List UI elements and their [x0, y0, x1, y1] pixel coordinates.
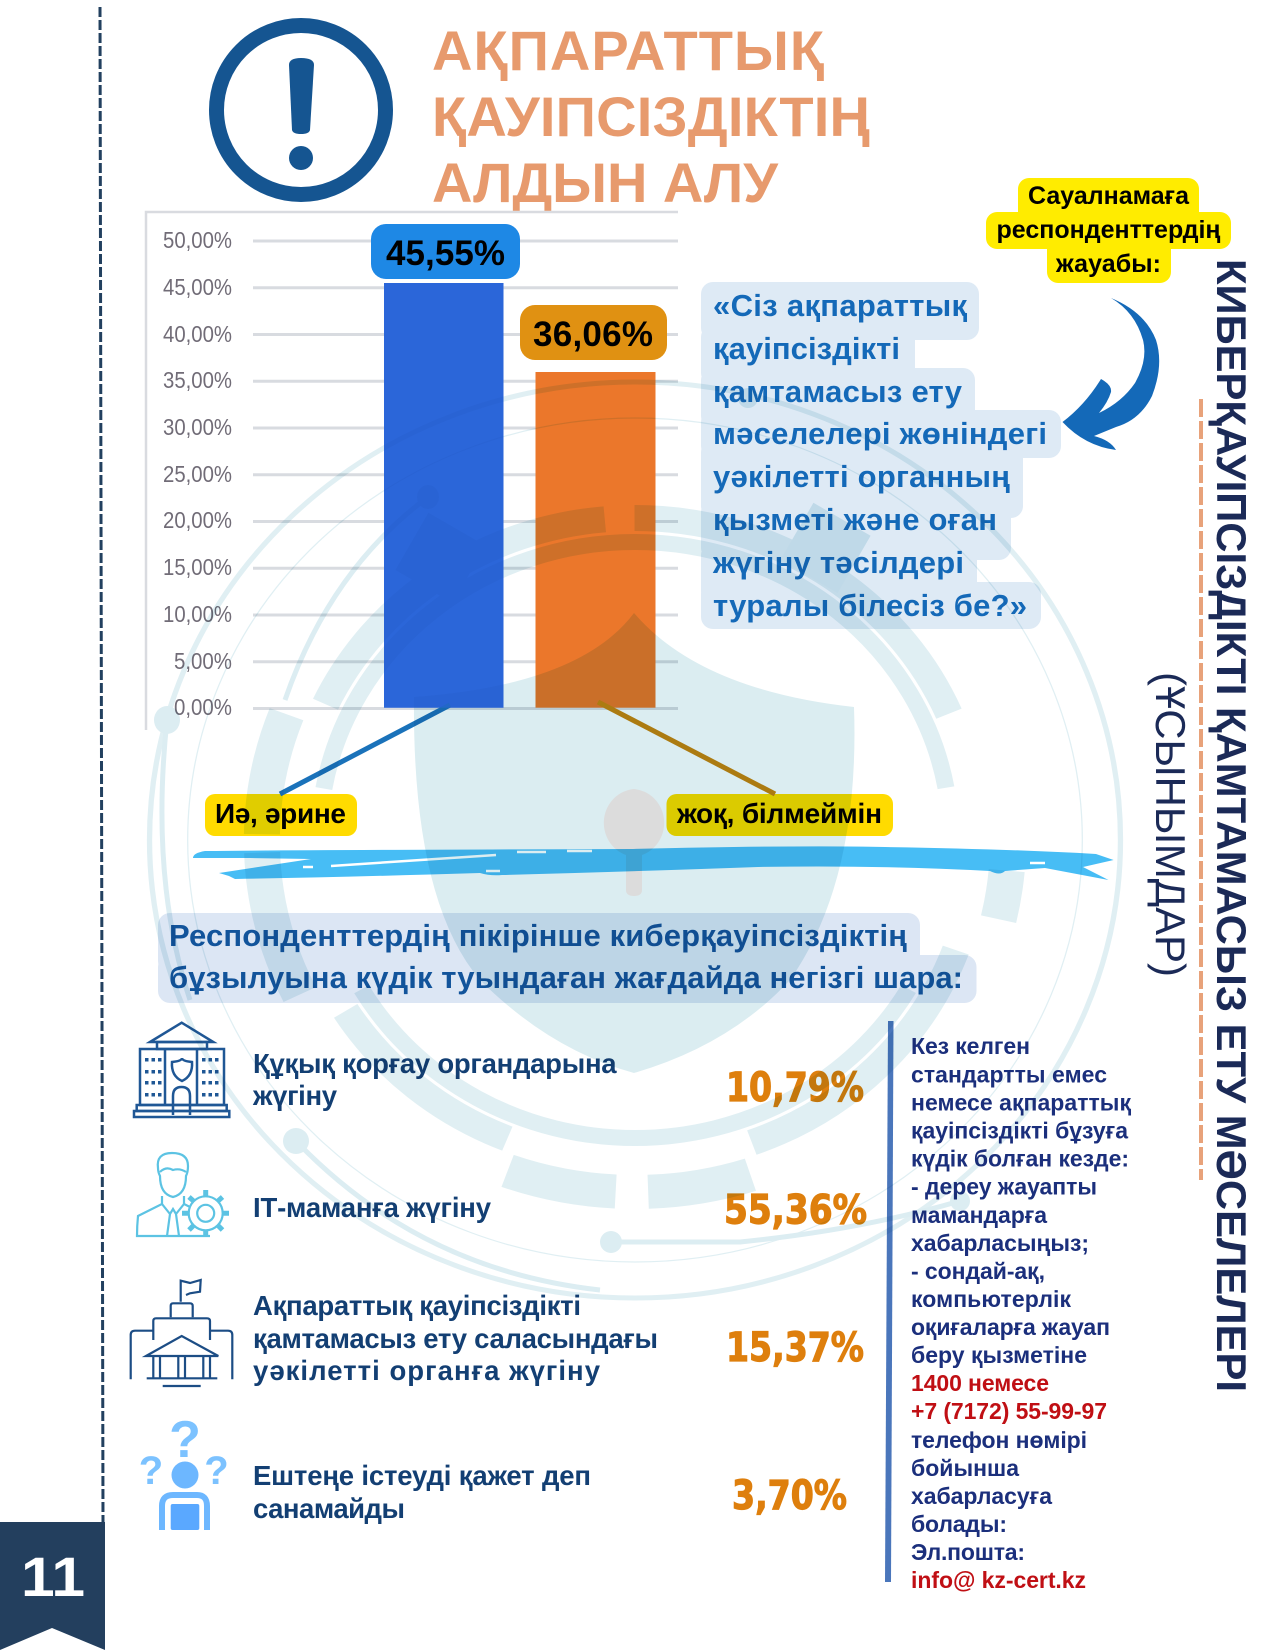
row 1: law enforcement: Құқық қорғау органдарына — [253, 1048, 617, 1079]
divider bar — [885, 1021, 894, 1582]
row 3: authorised body — [131, 1280, 658, 1386]
title: АҚПАРАТТЫҚ — [432, 19, 824, 82]
value label 36,06% — [520, 305, 667, 360]
title: АЛДЫН АЛУ — [432, 151, 779, 214]
icon: person with question marks: ? — [169, 1411, 201, 1469]
question text block: қызметі және оған — [713, 502, 997, 537]
advice text: компьютерлік — [911, 1286, 1071, 1312]
title — [432, 19, 870, 214]
advice text — [911, 1033, 1131, 1593]
chart gridlines and axis labels: 15,00% — [163, 554, 232, 580]
row 4: nothing needed: Ештеңе істеуді қажет деп — [253, 1460, 591, 1491]
icon: government building with flag — [131, 1280, 232, 1386]
title: ҚАУІПСІЗДІКТІҢ — [432, 85, 870, 148]
brush stroke — [193, 846, 1114, 880]
page number badge: 11 — [21, 1545, 85, 1608]
advice text: хабарласыңыз; — [911, 1230, 1089, 1256]
row 3: authorised body: уәкілетті органға жүгіну — [253, 1355, 601, 1386]
icon: exclamation mark in circle — [216, 26, 386, 194]
chart gridlines and axis labels — [163, 227, 678, 720]
answer tag: survey responses: Сауалнамаға — [1028, 182, 1190, 210]
percentages: 55,36% — [724, 1188, 867, 1234]
advice text: - дереу жауапты — [911, 1174, 1097, 1200]
chart gridlines and axis labels: 0,00% — [174, 694, 232, 720]
value label 36,06%: 36,06% — [533, 315, 653, 354]
chart gridlines and axis labels: 30,00% — [163, 414, 232, 440]
chart gridlines and axis labels: 10,00% — [163, 601, 232, 627]
subheading text block: бұзылуына күдік туындаған жағдайда негізгі шара: — [169, 960, 963, 995]
row 2: IT specialist: ІТ-маманға жүгіну — [253, 1192, 492, 1223]
advice text: оқиғаларға жауап — [911, 1314, 1110, 1340]
question text block: қауіпсіздікті — [713, 331, 900, 366]
question text block: туралы білесіз бе?» — [713, 588, 1027, 623]
chart gridlines and axis labels: 25,00% — [163, 461, 232, 487]
row 1: law enforcement — [134, 1023, 617, 1117]
icon: police building — [134, 1023, 229, 1117]
vertical heading: КИБЕРҚАУІПСІЗДІКТІ ҚАМТАМАСЫЗ ЕТУ МӘСЕЛЕЛЕРІ — [1208, 259, 1255, 1392]
advice text: хабарласуға — [911, 1483, 1052, 1509]
bar chart — [146, 212, 678, 730]
row 4: nothing needed — [139, 1411, 591, 1530]
advice text: - сондай-ақ, — [911, 1258, 1045, 1284]
advice text: info@ kz-cert.kz — [911, 1567, 1086, 1593]
row 2: IT specialist — [137, 1153, 492, 1237]
subheading text block — [158, 913, 976, 1003]
advice text: Кез келген — [911, 1033, 1030, 1059]
chart gridlines and axis labels: 20,00% — [163, 507, 232, 533]
row 4: nothing needed: санамайды — [253, 1493, 405, 1524]
watermark: shield and cyber rings — [150, 382, 1120, 1298]
vertical subheading: (ҰСЫНЫМДАР) — [1147, 672, 1194, 977]
answer label: no: жоқ, білмеймін — [676, 798, 882, 829]
question text block: уәкілетті органның — [713, 459, 1010, 494]
advice text: бойынша — [911, 1455, 1019, 1481]
advice text: мамандарға — [911, 1202, 1047, 1228]
shield — [414, 613, 854, 1073]
percentages: 10,79% — [726, 1065, 864, 1111]
value label 45,55% — [371, 224, 520, 279]
advice text: +7 (7172) 55-99-97 — [911, 1398, 1107, 1424]
answer label: yes: Иә, әрине — [215, 798, 346, 829]
question text block: жүгіну тәсілдері — [712, 545, 964, 580]
chart gridlines and axis labels: 45,00% — [163, 274, 232, 300]
value label 45,55%: 45,55% — [386, 234, 505, 273]
subheading text block: Респонденттердің пікірінше киберқауіпсіздіктің — [169, 918, 907, 953]
answer tag: survey responses — [986, 178, 1231, 283]
answer tag: survey responses: жауабы: — [1055, 250, 1161, 278]
percentages: 15,37% — [726, 1325, 864, 1371]
connector: no — [598, 702, 775, 794]
icon: person with question marks — [139, 1411, 229, 1530]
row 1: law enforcement: жүгіну — [252, 1080, 338, 1111]
page number badge — [0, 1522, 105, 1650]
advice text: қауіпсіздікті бұзуға — [911, 1118, 1128, 1144]
percentages: 3,70% — [732, 1473, 847, 1519]
answer label: yes — [205, 794, 357, 836]
bar: yes 45,55% — [384, 283, 504, 708]
chart gridlines and axis labels: 40,00% — [163, 321, 232, 347]
question text block: қамтамасыз ету — [713, 374, 963, 409]
advice text: стандартты емес — [911, 1062, 1107, 1088]
row 3: authorised body: Ақпараттық қауіпсіздікті — [253, 1290, 581, 1321]
percentages — [724, 1065, 867, 1519]
advice text: телефон нөмірі — [911, 1427, 1087, 1453]
keyhole — [604, 789, 664, 896]
advice text: Эл.пошта: — [911, 1539, 1025, 1565]
icon: specialist with gear — [137, 1153, 229, 1237]
chart gridlines and axis labels: 5,00% — [174, 648, 232, 674]
advice text: болады: — [911, 1511, 1007, 1537]
bar: no 36,06% — [536, 372, 656, 708]
advice text: беру қызметіне — [911, 1342, 1087, 1368]
advice text: күдік болған кезде: — [911, 1146, 1129, 1172]
icon: curved arrow — [1062, 298, 1159, 450]
row 3: authorised body: қамтамасыз ету саласындағы — [253, 1323, 658, 1354]
icon: person with question marks: ? — [139, 1449, 163, 1493]
question text block: «Сіз ақпараттық — [713, 288, 967, 323]
advice text: 1400 немесе — [911, 1370, 1049, 1396]
icon: person with question marks: ? — [204, 1449, 229, 1493]
connector: yes — [280, 705, 450, 794]
advice text: немесе ақпараттық — [911, 1090, 1131, 1116]
chart gridlines and axis labels: 50,00% — [163, 227, 232, 253]
chart gridlines and axis labels: 35,00% — [163, 367, 232, 393]
question text block — [701, 282, 1061, 629]
answer tag: survey responses: респонденттердің — [996, 216, 1220, 244]
answer label: no — [666, 794, 893, 836]
question text block: мәселелері жөніндегі — [713, 416, 1047, 451]
